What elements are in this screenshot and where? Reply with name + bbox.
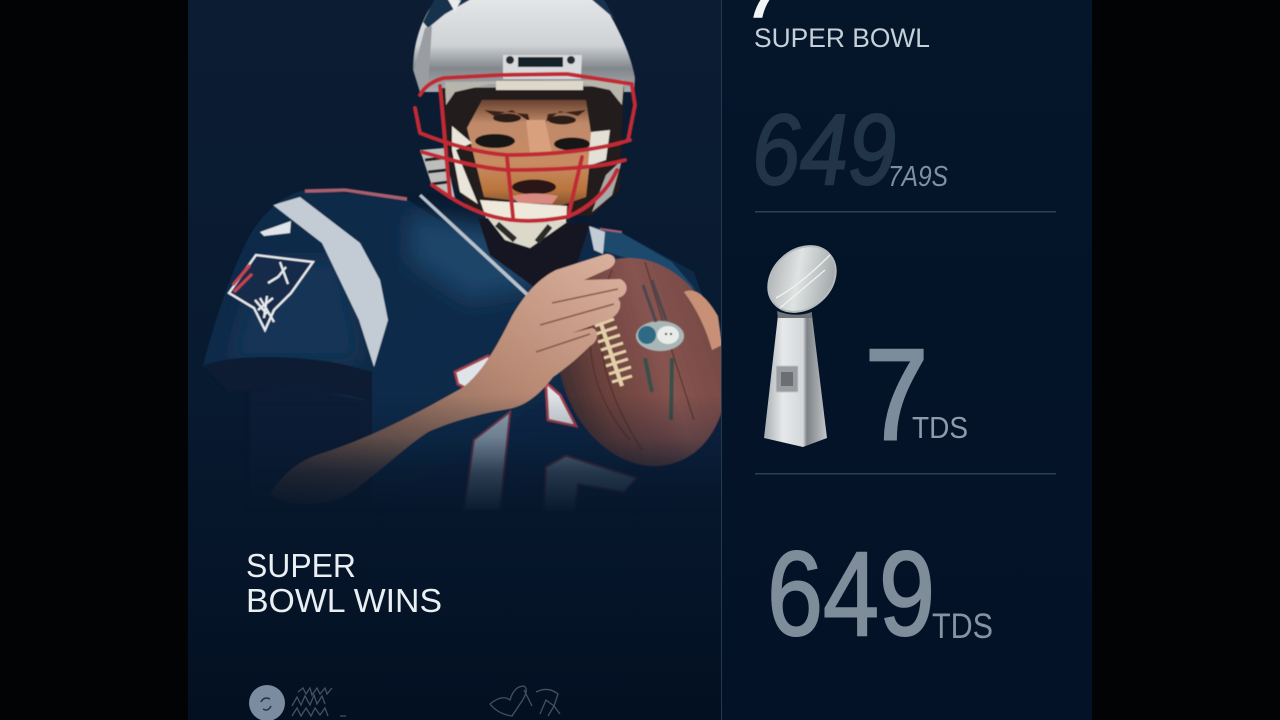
helmet: [413, 0, 635, 248]
footer badge icon: [249, 685, 285, 720]
heading: super bowl wins: BOWL WINS: [246, 582, 442, 619]
divider: [755, 211, 1056, 212]
football: [560, 257, 721, 467]
trophy nfl shield: [776, 366, 798, 392]
vertical divider: [721, 0, 722, 720]
heading: super bowl wins: SUPER: [246, 547, 356, 584]
stat: 649 tds: 649: [767, 527, 935, 661]
red facemask: [415, 74, 635, 221]
neck: [478, 218, 590, 290]
heading: super bowl wins: [246, 547, 442, 619]
helmet bumper and visor band: [445, 55, 624, 105]
stat: ghost 649: 7A9S: [888, 161, 949, 193]
left hand on ball: [684, 290, 722, 350]
stat: 7 tds: TDS: [912, 410, 968, 445]
stat: top super bowl: SUPER BOWL: [754, 23, 930, 53]
stat: 7 tds: [865, 323, 968, 467]
player illustration: [203, 0, 753, 520]
divider: [755, 473, 1056, 474]
stat: 649 tds: TDS: [932, 607, 993, 646]
ball logo: [636, 321, 684, 351]
helmet lining and face: [440, 86, 624, 216]
stat: top super bowl: [748, 0, 930, 53]
icon: lombardi trophy: [755, 233, 849, 447]
trophy football: [755, 233, 849, 325]
cheek pads and chin: [420, 126, 622, 248]
throwing arm and hand: [270, 254, 627, 504]
jersey torso: [203, 190, 722, 520]
panel: left player: [188, 0, 722, 720]
footer scribbled marks: [292, 686, 560, 716]
helmet shell: [413, 0, 635, 92]
laces: [595, 315, 632, 386]
stat: ghost 649: 649: [752, 94, 896, 206]
panel: right stats: [722, 0, 1092, 720]
trophy base: [764, 315, 827, 447]
stat: 7 tds: 7: [865, 323, 928, 467]
patriots shoulder logo: [229, 255, 313, 330]
